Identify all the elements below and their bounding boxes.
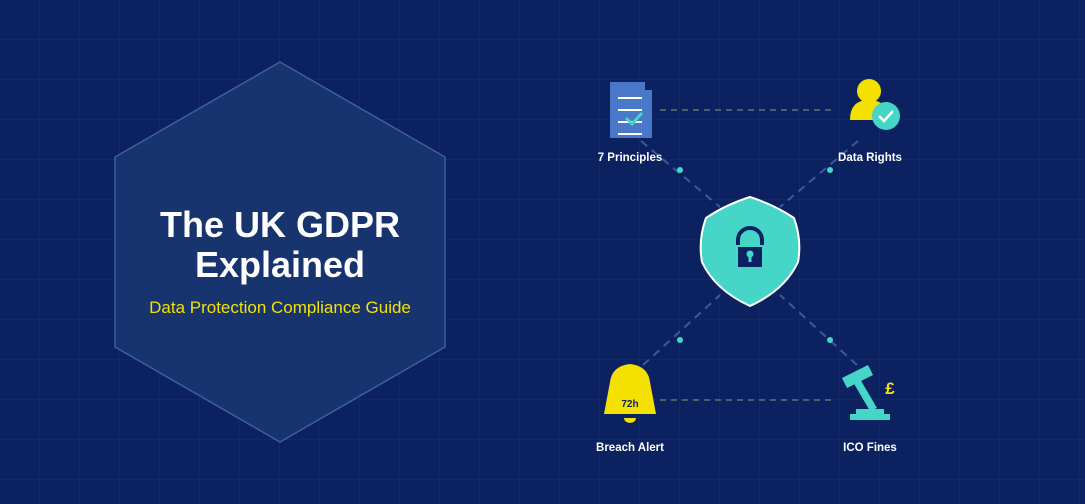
- icon: gavel with pound (ICO Fines): [842, 365, 895, 420]
- label: Breach Alert: Breach Alert: [596, 442, 664, 454]
- icon: bell 72h (Breach Alert): [604, 364, 656, 423]
- label: ICO Fines: ICO Fines: [843, 442, 897, 454]
- label: Data Rights: Data Rights: [838, 152, 902, 164]
- icon: shield with lock: [701, 197, 799, 306]
- hexagon panel: [115, 62, 445, 442]
- icon: person with check (Data Rights): [850, 79, 900, 130]
- connector lines: [641, 110, 858, 400]
- title: The UK GDPR: [160, 204, 400, 245]
- icon: gavel with pound (ICO Fines): £: [885, 379, 895, 398]
- icon: document (7 Principles): [610, 82, 652, 138]
- subtitle: Data Protection Compliance Guide: [149, 298, 411, 317]
- label: 7 Principles: 7 Principles: [598, 152, 662, 164]
- icon: bell 72h (Breach Alert): 72h: [621, 399, 639, 410]
- title line 2: Explained: [195, 244, 365, 285]
